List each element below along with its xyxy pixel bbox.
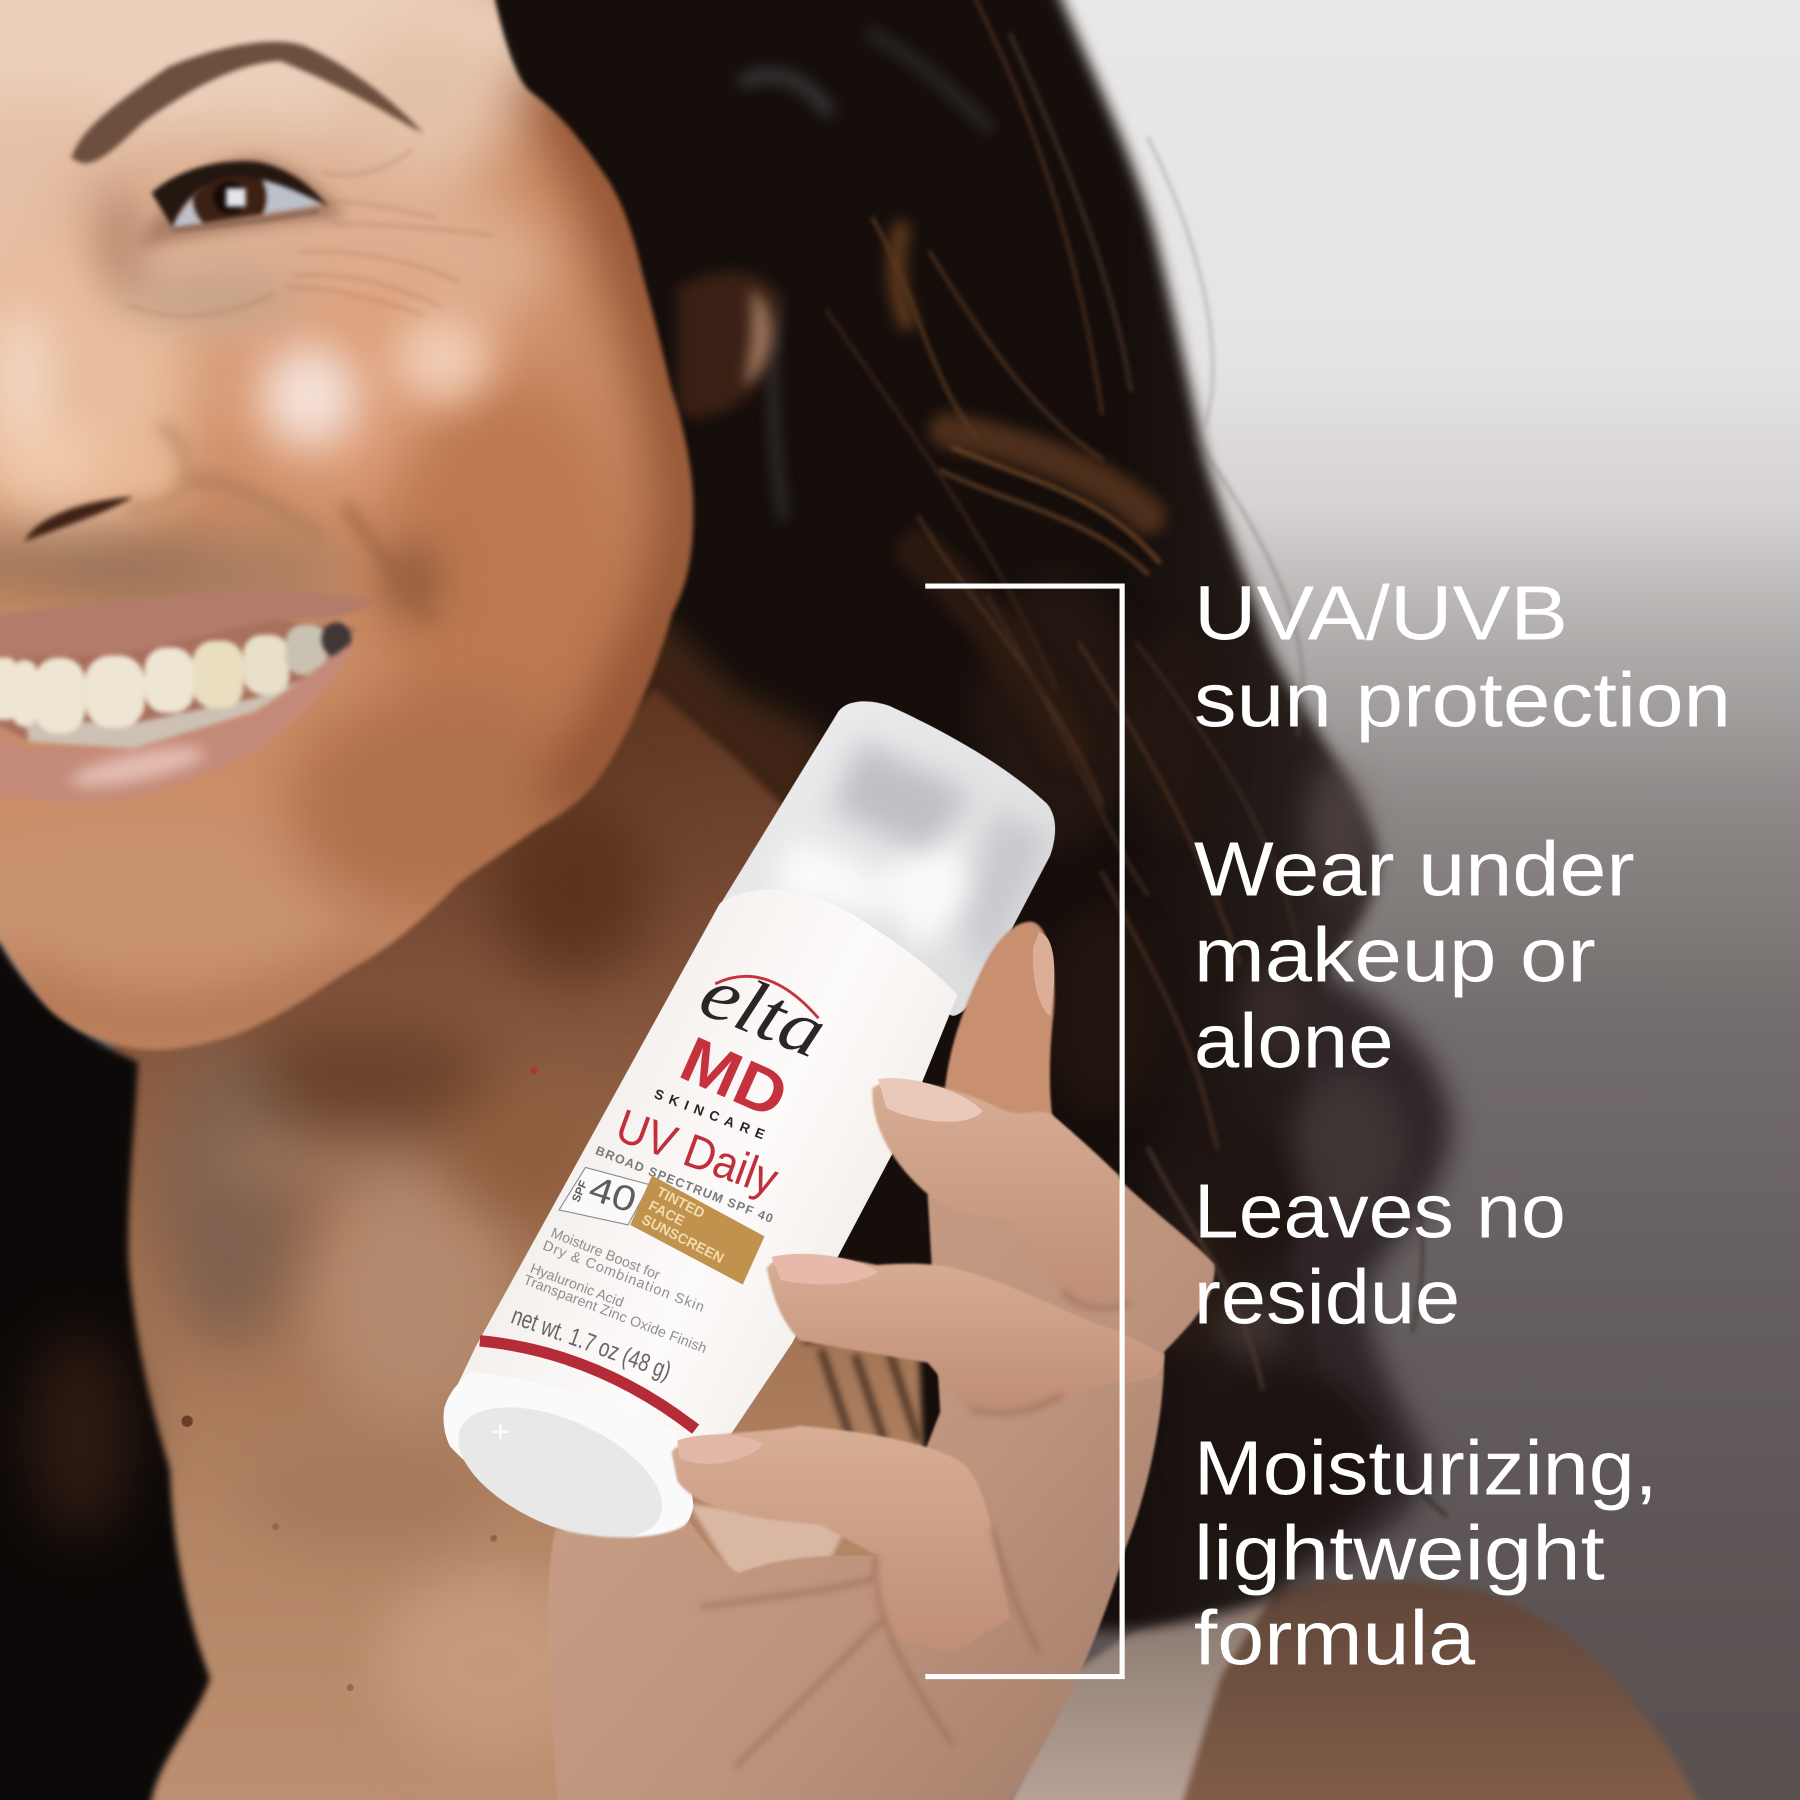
- benefit: leaves no residue: residue: [1194, 1255, 1460, 1341]
- claims text: Dry & Combination Skin: [540, 1238, 706, 1316]
- face tone shading: [0, 0, 689, 1026]
- shoulder and top strap: [976, 1581, 1722, 1800]
- hair strands over skin behind hand: [821, 1349, 918, 1441]
- benefit: leaves no residue: [1194, 1168, 1566, 1341]
- lower teeth: [25, 677, 310, 748]
- left hair: [0, 907, 210, 1800]
- chest patch behind fingers: [689, 1504, 849, 1578]
- base mold cross: [492, 1423, 509, 1440]
- claims text: Transparent Zinc Oxide Finish: [521, 1272, 709, 1357]
- UV Daily: UV Daily: [610, 1098, 786, 1206]
- benefit: UVA/UVB sun protection: sun protection: [1194, 658, 1731, 744]
- hair mass: [459, 0, 1452, 1630]
- broad spectrum: BROAD SPECTRUM SPF 40: [594, 1143, 775, 1226]
- claims text: Moisture Boost for: [548, 1225, 662, 1284]
- base rim: [444, 1372, 693, 1551]
- nail D: [677, 1435, 763, 1464]
- product bottle: [439, 689, 1068, 1565]
- net weight: net wt. 1.7 oz (48 g): [508, 1302, 675, 1385]
- left hair brown tint: [29, 1332, 132, 1538]
- tinted gold label: SUNSCREEN: [639, 1212, 726, 1267]
- benefit: wear under makeup or alone: makeup or: [1194, 913, 1596, 999]
- neck shading: [161, 792, 654, 1756]
- mouth interior: [0, 620, 357, 745]
- benefit: wear under makeup or alone: [1194, 826, 1635, 1085]
- bracket line: [925, 586, 1122, 1677]
- benefit: wear under makeup or alone: alone: [1194, 999, 1394, 1085]
- ear: [677, 271, 779, 418]
- claims text: Hyaluronic Acid: [528, 1261, 626, 1311]
- red stripe: [480, 1341, 696, 1429]
- nail B: [878, 1078, 983, 1122]
- logo elta: elta: [689, 949, 838, 1074]
- benefit: moisturizing lightweight formula: formula: [1194, 1596, 1475, 1682]
- hand body: [870, 1102, 1215, 1800]
- lower eyelid: [172, 211, 319, 230]
- upper teeth: [0, 622, 351, 734]
- cheek highlights: [0, 189, 490, 616]
- finger C: [767, 1255, 1164, 1407]
- benefits list: [1194, 570, 1731, 1682]
- frosted cap: [712, 701, 1056, 1016]
- upper lip: [0, 591, 378, 658]
- SPF box: 40: [584, 1168, 641, 1221]
- neck and chest: [115, 597, 930, 1800]
- wispy lower right hair: [1148, 941, 1452, 1596]
- lower lip: [0, 643, 351, 804]
- benefit: UVA/UVB sun protection: UVA/UVB: [1194, 570, 1568, 656]
- eyebrow: [71, 42, 424, 163]
- upper eyelash line: [152, 161, 328, 227]
- benefit: leaves no residue: Leaves no: [1194, 1168, 1566, 1254]
- finger D: [672, 1426, 1010, 1653]
- lower hair clump: [976, 574, 1406, 1544]
- index finger tip: [944, 922, 1062, 1159]
- benefit: wear under makeup or alone: Wear under: [1194, 826, 1635, 912]
- logo MD: MD: [670, 1023, 798, 1132]
- hand creases: [700, 1291, 1131, 1768]
- hair highlights: [746, 0, 1446, 1515]
- wrinkles: [126, 149, 494, 316]
- SPF box: [559, 1167, 650, 1225]
- SPF box: SPF: [570, 1179, 590, 1204]
- finger B: [872, 1082, 1131, 1301]
- benefit: moisturizing lightweight formula: Moisturizing,: [1194, 1426, 1658, 1512]
- benefit: moisturizing lightweight formula: lightweight: [1194, 1511, 1605, 1597]
- nail C: [771, 1254, 878, 1284]
- claims text: [521, 1225, 709, 1357]
- skincare: SKINCARE: [652, 1086, 767, 1142]
- face: [0, 0, 712, 1068]
- bottle body: [444, 890, 957, 1483]
- index nail: [1033, 932, 1054, 1016]
- tinted gold label: TINTED: [654, 1184, 707, 1222]
- logo arc: [715, 976, 818, 1018]
- tinted gold label: FACE: [646, 1198, 687, 1230]
- back of hand: [548, 1521, 1010, 1800]
- base inner: [439, 1380, 681, 1565]
- nose: [22, 420, 389, 565]
- benefit: UVA/UVB sun protection: [1194, 570, 1731, 744]
- neck spots: [181, 1068, 537, 1691]
- hand holding bottle: [548, 922, 1215, 1800]
- eye: [138, 158, 344, 247]
- lower lip highlight: [68, 739, 208, 795]
- tinted gold label: [630, 1176, 765, 1285]
- benefit: moisturizing lightweight formula: [1194, 1426, 1658, 1682]
